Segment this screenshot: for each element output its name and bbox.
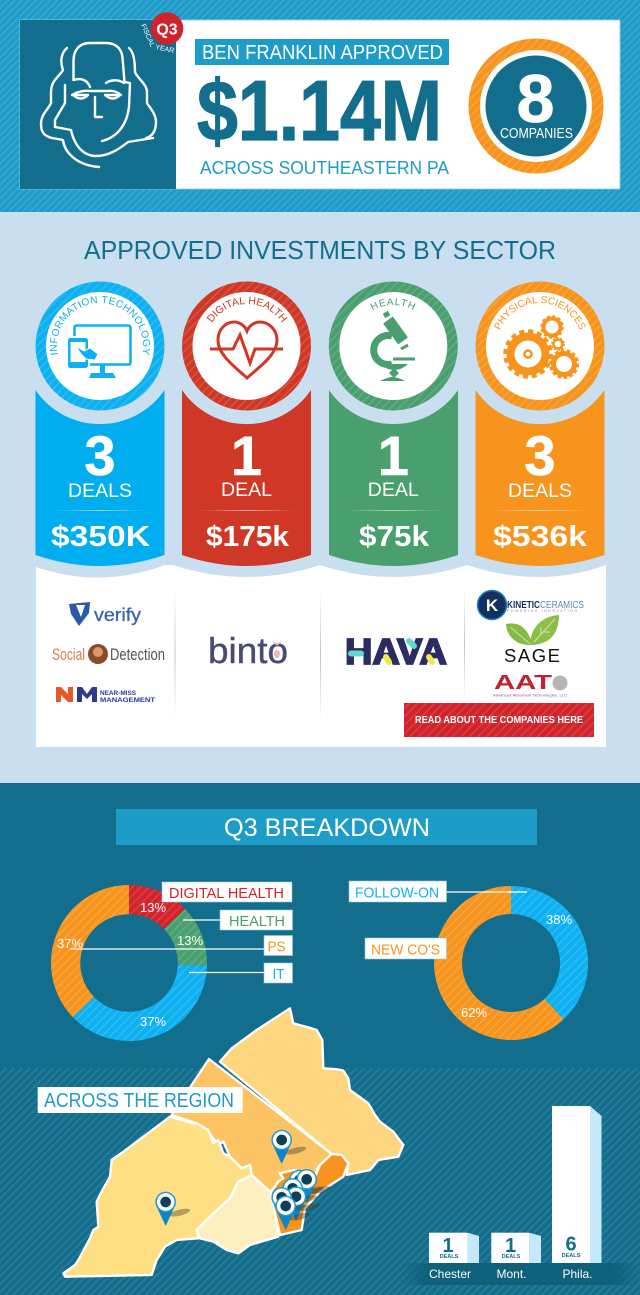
- bar: Chester: DEALS: [440, 1254, 459, 1260]
- label: health: HEALTH: [229, 913, 285, 930]
- logo: binto: binto: [208, 630, 288, 671]
- badge: Q3 fiscal year: [139, 12, 183, 55]
- bar: Philadelphia: [552, 1106, 602, 1281]
- label: IT: IT: [272, 966, 284, 983]
- logo: Kinetic Ceramics: POWERING INNOVATION: [507, 609, 577, 613]
- banner: physical sciences stats: $536k: [493, 521, 588, 553]
- headline amount: $1.14M: [197, 64, 442, 159]
- heading: sector: APPROVED INVESTMENTS BY SECTOR: [84, 235, 556, 265]
- region: Bucks county: [220, 1008, 403, 1175]
- icon: physical sciences badge: [476, 282, 604, 410]
- chart: follow-on vs new companies donut: 62%: [461, 1005, 487, 1020]
- badge: Q3 fiscal year: Q3: [156, 22, 178, 38]
- logo: AAT: Advanced Absorbent Technologies, LLC: [493, 692, 567, 698]
- banner: digital health stats: DEAL: [221, 480, 272, 501]
- logo: Kinetic Ceramics: K: [486, 596, 499, 615]
- icon: physical sciences badge: PHYSICAL SCIENCES: [494, 296, 586, 330]
- label: PS: PS: [268, 938, 286, 956]
- chart: sector donut: 13%: [140, 900, 166, 915]
- logo: Social Detection: [52, 644, 165, 664]
- icon: map pins: [155, 1130, 332, 1230]
- bar: Montgomery: [491, 1233, 541, 1281]
- logo: Near-Miss Management: NEAR-MISS: [100, 691, 136, 697]
- logo: Near-Miss Management: MANAGEMENT: [100, 697, 155, 704]
- panel: physical sciences: [476, 282, 604, 566]
- bar: Chester: [429, 1233, 479, 1281]
- bar chart: deals by county: [400, 1106, 640, 1285]
- banner: health stats: 1: [378, 424, 409, 487]
- panel: digital health: [182, 282, 311, 566]
- header card: [20, 12, 620, 189]
- icon: digital health badge: [182, 282, 311, 410]
- banner: digital health stats: [182, 390, 311, 566]
- bar: Chester: 1: [442, 1235, 454, 1257]
- bar: Philadelphia: DEALS: [562, 1253, 581, 1259]
- icon: digital health badge: DIGITAL HEALTH: [206, 296, 288, 322]
- panel: company logos: [36, 565, 606, 747]
- icon: IT badge: [36, 282, 164, 410]
- logo: verify: verify: [94, 605, 141, 625]
- heading: Q3 breakdown: [116, 809, 537, 845]
- button: read about the companies: [404, 703, 594, 737]
- banner: health stats: DEAL: [368, 480, 419, 501]
- label: across the region: ACROSS THE REGION: [44, 1090, 234, 1112]
- logo: Kinetic Ceramics: KINETIC: [507, 600, 540, 611]
- banner: digital health stats: 1: [231, 424, 262, 487]
- logo: verify: [69, 602, 141, 626]
- bar: Montgomery: Mont.: [496, 1267, 527, 1281]
- banner: IT stats: 3: [84, 424, 116, 487]
- banner: health stats: [329, 390, 458, 566]
- logo: Kinetic Ceramics: CERAMICS: [540, 600, 584, 611]
- section: approved investments by sector: [0, 212, 640, 783]
- banner: IT stats: DEALS: [68, 481, 132, 502]
- panel: health: [328, 282, 458, 566]
- region: Chester county: [63, 1117, 252, 1277]
- chart: sector donut: 37%: [140, 1014, 166, 1029]
- region: Montgomery county: [172, 1059, 332, 1192]
- label: follow-on: FOLLOW-ON: [355, 884, 439, 902]
- heading: Ben Franklin approved: BEN FRANKLIN APPROVED: [202, 42, 443, 64]
- map: southeastern PA region: [63, 1008, 403, 1277]
- icon: health badge: HEALTH: [370, 298, 416, 310]
- icon: health badge: [328, 282, 458, 410]
- banner: digital health stats: $175k: [206, 521, 290, 553]
- label: health: [183, 910, 292, 930]
- badge: Q3 fiscal year: YEAR: [155, 44, 175, 55]
- banner: physical sciences stats: 3: [524, 424, 556, 487]
- region: Philadelphia county: [271, 1154, 348, 1235]
- bar: Chester: Chester: [429, 1267, 471, 1281]
- banner: physical sciences stats: [476, 390, 604, 566]
- label: PS: [70, 936, 292, 956]
- logo: Near-Miss Management: [56, 687, 155, 704]
- bar: Montgomery: DEALS: [502, 1254, 521, 1260]
- chart: follow-on vs new companies donut: 38%: [546, 912, 572, 927]
- label: new companies: NEW CO'S: [371, 942, 440, 958]
- logo: Social Detection: Social: [52, 645, 85, 664]
- button: read about the companies: READ ABOUT THE COMPANIES HERE: [415, 714, 583, 726]
- region: Delaware county: [197, 1175, 278, 1253]
- logo: AAT: AAT: [494, 672, 552, 694]
- panel: information technology: [36, 282, 164, 566]
- label: IT: [189, 963, 292, 983]
- badge: 8 companies: 8: [517, 61, 554, 137]
- badge: 8 companies: COMPANIES: [500, 126, 573, 142]
- logo: HAVA: HAVA: [345, 631, 447, 672]
- banner: health stats: $75k: [359, 521, 430, 553]
- icon: Ben Franklin portrait panel: [20, 20, 176, 189]
- heading: Q3 breakdown: Q3 BREAKDOWN: [224, 814, 430, 842]
- logo: SAGE: [504, 615, 560, 666]
- banner: IT stats: $350K: [51, 521, 150, 553]
- icon: IT badge: INFORMATION TECHNOLOGY: [50, 296, 150, 355]
- logo: Social Detection: Detection: [110, 645, 165, 664]
- label: follow-on: [349, 881, 527, 902]
- bar: Philadelphia: Phila.: [562, 1267, 593, 1281]
- bar: Philadelphia: 6: [565, 1234, 577, 1256]
- chart: sector donut: [57, 882, 292, 1029]
- logo: AAT: [493, 672, 568, 698]
- banner: IT stats: [36, 390, 164, 566]
- chart: sector donut: 37%: [57, 936, 83, 951]
- section: Q3 breakdown: [0, 783, 640, 1295]
- subheading: ACROSS SOUTHEASTERN PA: [200, 157, 450, 178]
- logo: SAGE: SAGE: [504, 645, 560, 666]
- banner: physical sciences stats: DEALS: [508, 481, 572, 502]
- header band: [0, 0, 640, 212]
- logo: Kinetic Ceramics: [478, 590, 584, 620]
- label: digital health: DIGITAL HEALTH: [169, 885, 284, 902]
- badge: 8 companies: [468, 38, 604, 174]
- chart: sector donut: 13%: [177, 933, 203, 948]
- bar: Montgomery: 1: [505, 1235, 516, 1257]
- badge: Q3 fiscal year: FISCAL: [139, 23, 156, 48]
- chart: follow-on vs new companies donut: [349, 881, 574, 1026]
